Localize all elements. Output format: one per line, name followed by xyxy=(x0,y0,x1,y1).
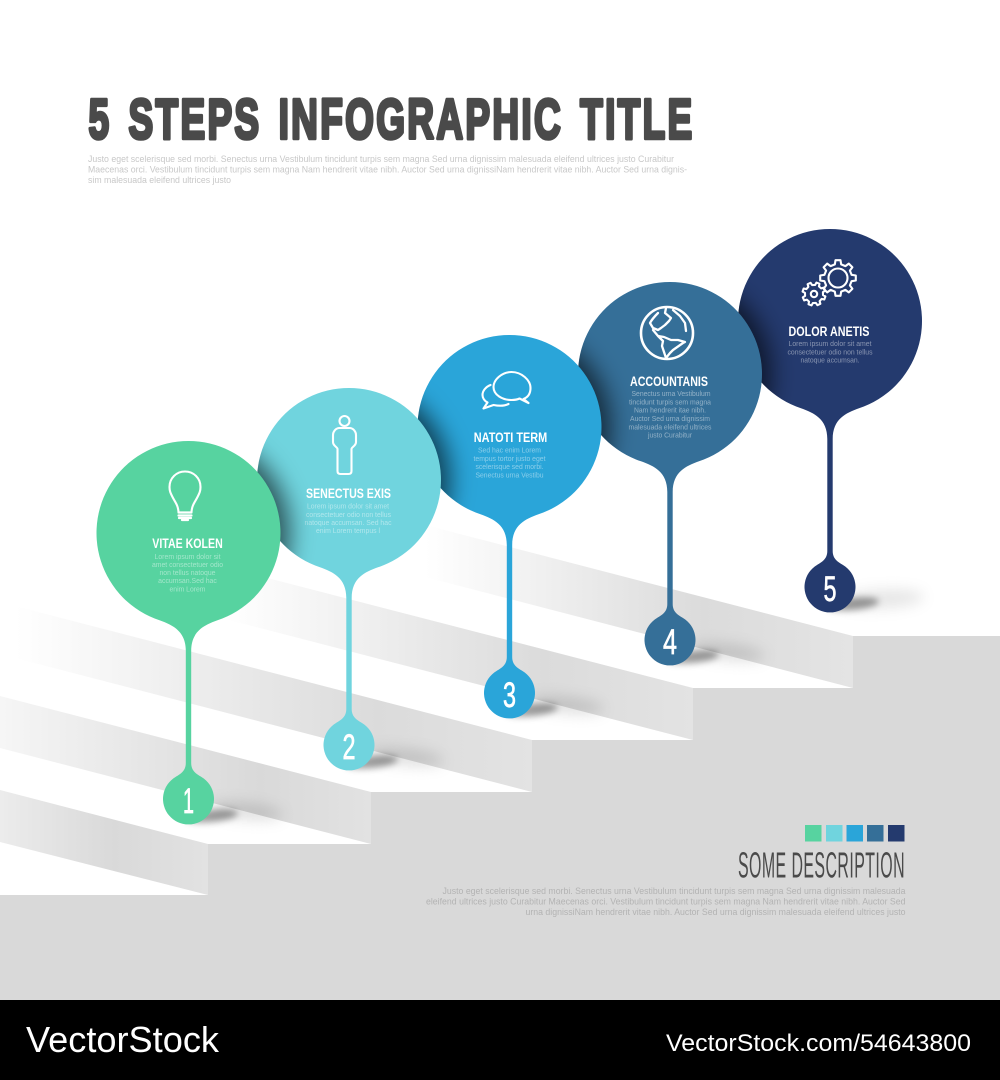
description: Auctor Sed urna dignissim xyxy=(630,416,710,423)
shadow step 1 xyxy=(186,799,284,825)
description: enim Lorem tempus l xyxy=(316,528,380,535)
intro text: Maecenas orci. Vestibulum tincidunt turpis sem magna Nam hendrerit vitae nibh. Auctor Sed urna dignissiNam hendrerit vitae nibh. Auctor Sed urna dignis- xyxy=(88,164,687,174)
description xyxy=(152,554,223,594)
footer logo: VectorStock xyxy=(26,1019,220,1060)
description text xyxy=(426,886,906,917)
stair riser 2 xyxy=(0,696,371,844)
number 4: 4 xyxy=(663,623,677,662)
shadow step 3 xyxy=(506,693,605,719)
description text: eleifend ultrices justo Curabitur Maecenas orci. Vestibulum tincidunt turpis sem magna Nam hendrerit vitae nibh. Auctor Sed xyxy=(426,896,906,906)
intro text xyxy=(88,154,687,185)
description: Sed hac enim Lorem xyxy=(478,448,541,454)
number 5: 5 xyxy=(824,570,836,609)
shadow of circle 4 on circle 5 xyxy=(738,289,784,398)
step 1: vitae kolen xyxy=(96,441,280,824)
ground shadows xyxy=(186,588,924,825)
description: Lorem ipsum dolor sit amet xyxy=(788,341,872,348)
icon: light bulb xyxy=(170,472,200,520)
number 2: 2 xyxy=(342,728,356,767)
stair riser 4 xyxy=(225,567,693,740)
description: Lorem ipsum dolor sit xyxy=(154,554,221,561)
icon: gears xyxy=(799,260,856,309)
description xyxy=(788,341,873,365)
description: Lorem ipsum dolor sit amet xyxy=(307,504,389,510)
description: tincidunt turpis sem magna xyxy=(629,399,711,406)
description: consectetuer odio non tellus xyxy=(788,349,873,356)
description: scelerisque sed morbi. xyxy=(476,464,544,471)
stair floor block xyxy=(0,636,1000,1000)
stair riser 5 xyxy=(425,525,853,688)
step 4: accountanis xyxy=(578,282,762,665)
shadow step 5 xyxy=(827,588,924,613)
heading: VITAE KOLEN xyxy=(152,536,223,551)
description: accumsan.Sed hac xyxy=(158,578,217,585)
stair riser 3 xyxy=(15,606,532,792)
number 3: 3 xyxy=(503,676,516,715)
footer bar xyxy=(0,1000,1000,1080)
description: amet consectetuer odio xyxy=(152,562,223,569)
shadow of circle 3 on circle 4 xyxy=(578,340,625,452)
description xyxy=(628,391,712,440)
description: natoque accumsan. xyxy=(800,358,860,365)
description: justo Curabitur xyxy=(647,433,693,440)
shadow step 2 xyxy=(346,745,445,771)
description: malesuada eleifend ultrices xyxy=(628,424,712,431)
description text: urna dignissiNam hendrerit vitae nibh. Auctor Sed urna dignissim malesuada eleifend ultrices justo xyxy=(526,907,906,917)
description: Nam hendrerit itae nibh. xyxy=(634,408,706,415)
shadow of circle 1 on circle 2 xyxy=(257,444,306,560)
heading: NATOTI TERM xyxy=(474,430,547,445)
description xyxy=(474,448,546,480)
intro text: sim malesuada eleifend ultrices justo xyxy=(88,175,231,185)
step 3: natoti term xyxy=(418,335,602,718)
shadow of circle 2 on circle 3 xyxy=(418,391,467,506)
description: non tellus natoque xyxy=(160,570,216,577)
legend swatches xyxy=(805,825,904,842)
description: consectetuer odio non tellus xyxy=(306,512,392,519)
description: Senectus urna Vestibulum xyxy=(632,391,711,398)
pin shape xyxy=(738,229,922,612)
icon: globe xyxy=(641,307,693,359)
description text: Justo eget scelerisque sed morbi. Senectus urna Vestibulum tincidunt turpis sem magna Sed urna dignissim malesuada xyxy=(442,886,906,896)
heading: ACCOUNTANIS xyxy=(630,374,708,389)
heading: SENECTUS EXIS xyxy=(306,486,391,501)
description: Senectus urna Vestibu xyxy=(476,472,544,480)
staircase xyxy=(0,525,1000,1000)
number 1: 1 xyxy=(183,782,194,821)
stair riser 1 xyxy=(0,790,208,895)
heading: DOLOR ANETIS xyxy=(788,324,870,339)
step 2: senectus exis xyxy=(257,388,441,770)
icon: chat bubbles xyxy=(482,372,530,408)
description: enim Lorem xyxy=(170,587,206,594)
description: natoque accumsan. Sed hac xyxy=(304,520,392,527)
description: tempus tortor justo eget xyxy=(474,456,546,463)
pin shape xyxy=(96,441,280,824)
icon: person xyxy=(333,416,356,474)
pin shape xyxy=(418,335,602,718)
description xyxy=(304,504,392,535)
title: 5 STEPS INFOGRAPHIC TITLE xyxy=(88,88,694,150)
intro text: Justo eget scelerisque sed morbi. Senectus urna Vestibulum tincidunt turpis sem magna Sed urna dignissim malesuada eleifend ultrices justo Curabitur xyxy=(88,154,674,164)
step 5: dolor anetis xyxy=(738,229,922,612)
pin shape xyxy=(257,388,441,770)
pin shape xyxy=(578,282,762,665)
footer id: VectorStock.com/54643800 xyxy=(666,1030,971,1057)
shadow step 4 xyxy=(667,640,766,666)
